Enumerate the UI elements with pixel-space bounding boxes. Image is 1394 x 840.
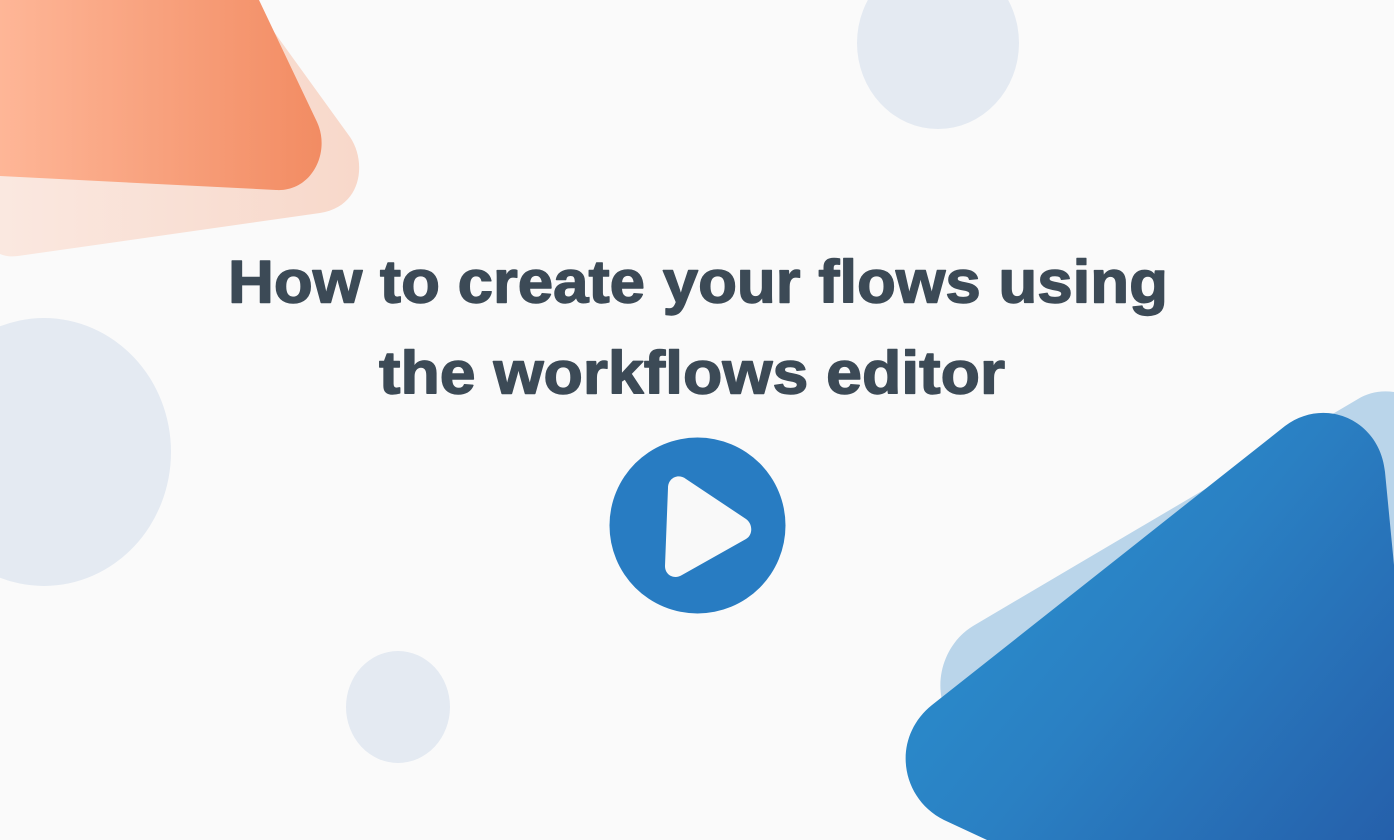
decorative shape: blue triangle	[906, 413, 1394, 840]
decorative circle: top	[857, 0, 1019, 129]
title	[228, 248, 1168, 406]
decorative shape: orange triangle	[0, 0, 322, 190]
title: the workflows editor	[379, 340, 1005, 406]
title: How to create your flows using	[228, 248, 1168, 316]
icon: play button	[610, 438, 786, 614]
decorative shape: pale blue triangle	[940, 391, 1394, 840]
decorative circle: bottom	[346, 651, 450, 763]
decorative shape: pale orange triangle	[0, 0, 359, 256]
decorative circle: left	[0, 318, 171, 586]
